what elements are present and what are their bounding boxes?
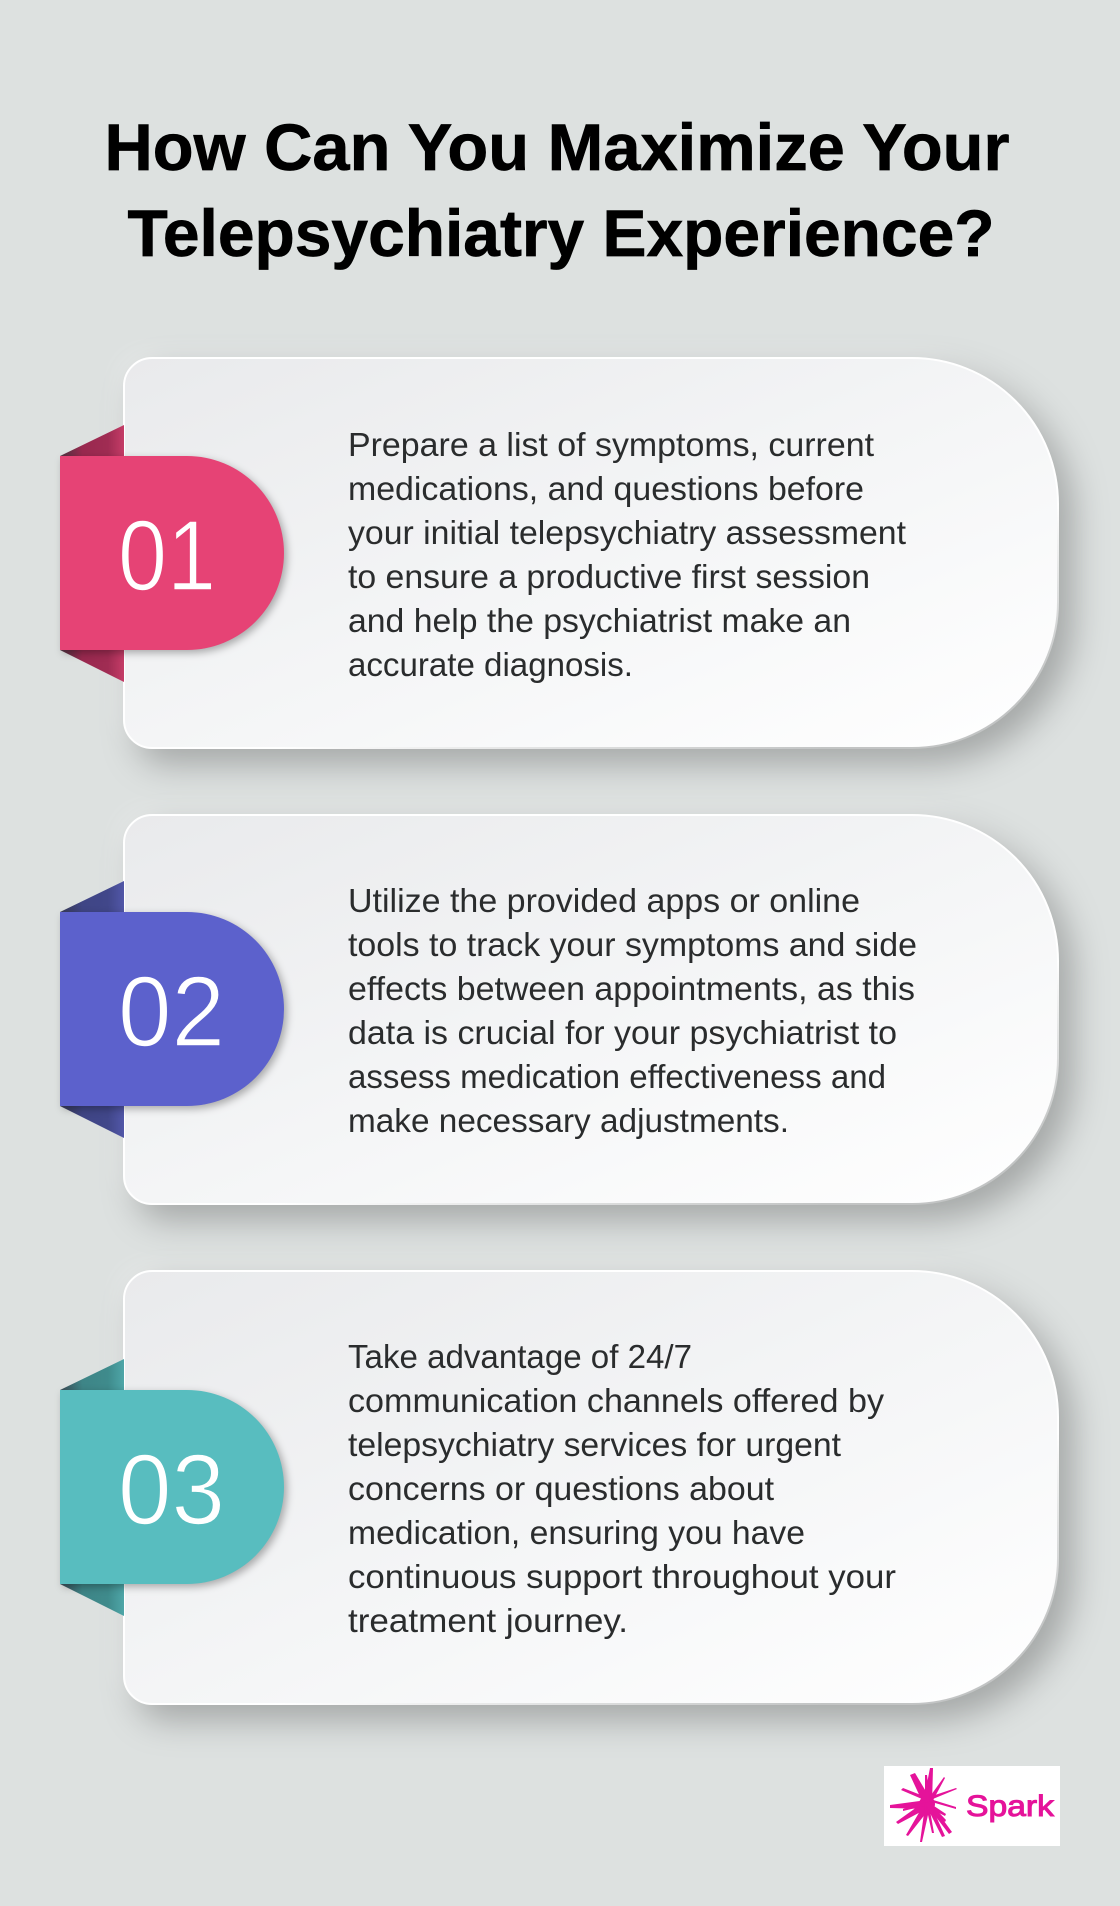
title xyxy=(104,110,1010,270)
text block 3: communication channels offered by xyxy=(348,1382,885,1419)
card 3 xyxy=(124,1271,1058,1704)
title: How Can You Maximize Your xyxy=(104,110,1010,184)
text block 3: Take advantage of 24/7 xyxy=(348,1338,692,1375)
badge 2 xyxy=(60,912,284,1106)
text block 1: Prepare a list of symptoms, current xyxy=(348,426,874,463)
card 2 xyxy=(124,815,1058,1204)
text block 1: to ensure a productive first session xyxy=(348,558,870,595)
text block 3: continuous support throughout your xyxy=(348,1558,896,1595)
text block 2: effects between appointments, as this xyxy=(348,970,915,1007)
text block 2: make necessary adjustments. xyxy=(348,1102,789,1139)
text block 3: concerns or questions about xyxy=(348,1470,774,1507)
text block 1 xyxy=(348,426,906,683)
panel: step 2 xyxy=(60,815,1058,1204)
text block 2 xyxy=(348,882,917,1139)
text block 3: telepsychiatry services for urgent xyxy=(348,1426,841,1463)
number 02: 02 xyxy=(118,956,225,1068)
text block 1: medications, and questions before xyxy=(348,470,864,507)
panel: step 1 xyxy=(60,358,1058,748)
text block 2: Utilize the provided apps or online xyxy=(348,882,860,919)
wordmark: Spark xyxy=(966,1790,1055,1823)
fold triangles 1 xyxy=(60,425,124,682)
fold triangles 3 xyxy=(60,1359,124,1616)
text block 3 xyxy=(348,1338,896,1639)
badge 3 xyxy=(60,1390,284,1584)
badge 1 xyxy=(60,456,284,650)
icon: starburst xyxy=(890,1768,957,1842)
text block 1: your initial telepsychiatry assessment xyxy=(348,514,906,551)
title: Telepsychiatry Experience? xyxy=(128,196,994,270)
text block 1: accurate diagnosis. xyxy=(348,646,633,683)
text block 2: tools to track your symptoms and side xyxy=(348,926,917,963)
logo: Spark xyxy=(884,1766,1060,1846)
fold triangles 2 xyxy=(60,881,124,1138)
number 03: 03 xyxy=(118,1434,225,1546)
text block 3: medication, ensuring you have xyxy=(348,1514,805,1551)
text block 3: treatment journey. xyxy=(348,1602,628,1639)
text block 2: assess medication effectiveness and xyxy=(348,1058,886,1095)
card 1 xyxy=(124,358,1058,748)
text block 2: data is crucial for your psychiatrist to xyxy=(348,1014,897,1051)
number 01: 01 xyxy=(118,500,216,612)
text block 1: and help the psychiatrist make an xyxy=(348,602,851,639)
panel: step 3 xyxy=(60,1271,1058,1704)
